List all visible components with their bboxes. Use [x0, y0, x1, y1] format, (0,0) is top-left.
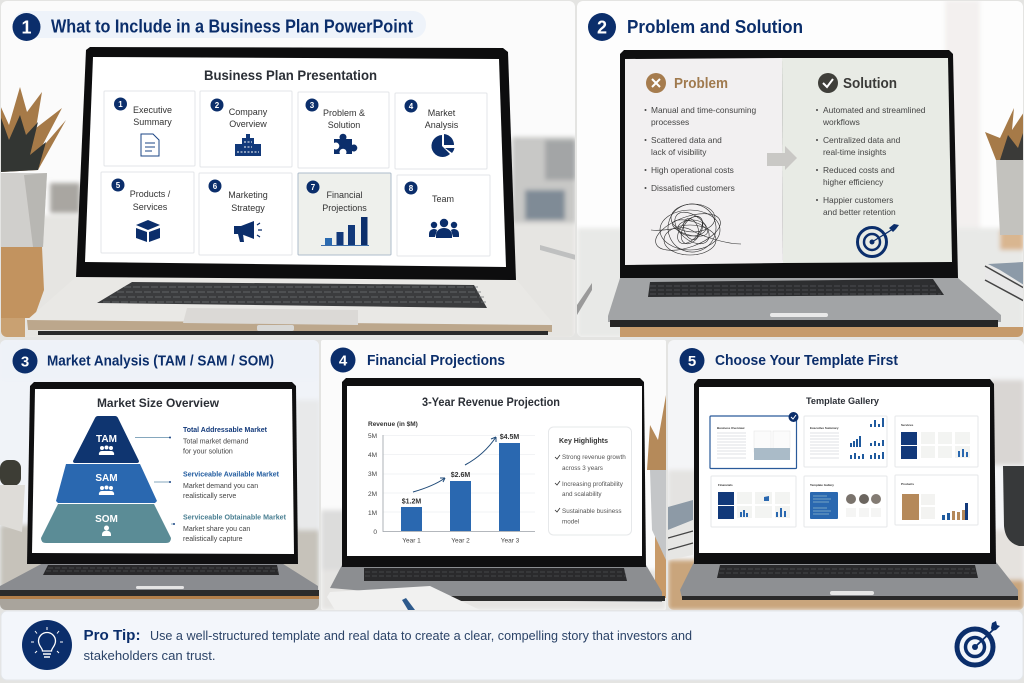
tip text: stakeholders can trust.: [84, 649, 216, 663]
SOM description: Market share you can: [183, 526, 250, 533]
template 2: Executive Summary: [810, 426, 839, 430]
template 5: [804, 476, 887, 527]
TAM tier: TAM: [96, 434, 117, 445]
card: market analysis: 4: [409, 102, 414, 111]
card: problem and solution: 3: [310, 101, 315, 110]
card: financial projections: [298, 173, 391, 255]
card: products and services: Services: [133, 202, 168, 212]
SAM description: Serviceable Available Market: [183, 470, 279, 478]
screen: [625, 58, 952, 265]
bar chart: 5M: [368, 433, 377, 440]
bar chart: Year 1: [402, 538, 421, 544]
panel 1: what to include: [0, 1, 576, 340]
heading 4: Financial Projections: [367, 353, 505, 369]
key highlights box: Sustainable business: [562, 508, 622, 515]
card: market analysis: Market: [428, 108, 456, 118]
screen: [347, 386, 642, 556]
template 6: Products: [901, 482, 914, 486]
icon: target: [957, 621, 1000, 665]
problem column: Problem: [674, 75, 728, 92]
card: products and services: 5: [116, 181, 121, 190]
TAM description: Total Addressable Market: [183, 425, 267, 434]
solution column: workflows: [822, 117, 860, 127]
key highlights box: and scalability: [562, 491, 602, 498]
key highlights box: across 3 years: [562, 465, 603, 472]
template 3: [895, 416, 978, 467]
card: problem and solution: Problem &: [323, 108, 365, 118]
TAM description: Total market demand: [183, 438, 248, 446]
icon: books: [985, 262, 1024, 301]
problem column: High operational costs: [651, 165, 734, 175]
slide title: Market Size Overview: [97, 396, 220, 410]
keyboard: [364, 568, 627, 581]
SOM description: Serviceable Obtainable Market: [183, 512, 286, 522]
card: products and services: Products /: [130, 189, 171, 199]
pyramid: [41, 416, 171, 543]
laptop 2: [608, 50, 1001, 327]
key highlights box: [548, 427, 632, 535]
template 5: Template Gallery: [810, 483, 834, 487]
tip text: Use a well-structured template and real data to create a clear, compelling story that investors and: [150, 629, 692, 643]
bar chart: $4.5M: [500, 434, 519, 441]
bar chart: $1.2M: [402, 498, 421, 506]
pro tip banner: [1, 611, 1023, 680]
card: marketing strategy: [199, 173, 292, 255]
key highlights box: Strong revenue growth: [562, 454, 626, 461]
card: problem and solution: Solution: [328, 120, 360, 130]
SOM description: [183, 512, 286, 543]
icon: mug: [1003, 466, 1024, 546]
heading 3: Market Analysis (TAM / SAM / SOM): [47, 354, 274, 370]
template 4: [711, 476, 796, 527]
laptop 5: [680, 379, 1018, 600]
icon: plant right: [985, 108, 1024, 235]
laptop 3: [0, 382, 319, 599]
slide title: Business Plan Presentation: [204, 67, 377, 83]
solution column: [816, 73, 926, 217]
template 4: Financials: [718, 483, 733, 487]
card: market analysis: [395, 93, 487, 169]
card: executive summary: Summary: [133, 117, 172, 127]
bar chart: Year 3: [501, 538, 520, 544]
solution column: Happier customers: [823, 195, 893, 205]
bar chart: Revenue (in $M): [368, 421, 418, 428]
card: executive summary: 1: [118, 100, 123, 109]
card: executive summary: Executive: [133, 105, 172, 115]
bar chart: [368, 421, 535, 544]
heading 1: 1: [21, 18, 32, 38]
heading 1: [12, 11, 426, 41]
TAM description: for your solution: [183, 448, 233, 456]
icon: pen: [577, 283, 592, 315]
laptop 4: [330, 378, 665, 602]
heading 4: [330, 348, 505, 372]
SAM description: Market demand you can: [183, 483, 258, 490]
heading 5: 5: [688, 353, 696, 370]
icon: books: [668, 500, 693, 560]
card: financial projections: 7: [311, 183, 316, 192]
card: company overview: Overview: [229, 119, 267, 129]
bar chart: 1M: [368, 510, 377, 517]
heading 5: [680, 348, 898, 373]
keyboard: [717, 565, 978, 578]
arrow: [767, 146, 797, 170]
solution column: Reduced costs and: [823, 165, 895, 175]
bar chart: 4M: [368, 452, 377, 459]
card: problem and solution: [298, 92, 389, 168]
icon: plant: [647, 395, 666, 560]
template 6: [895, 475, 978, 525]
icon: cactus pot: [0, 460, 25, 532]
SOM description: realistically capture: [183, 536, 243, 543]
card: team: [397, 175, 490, 256]
card: company overview: 2: [215, 101, 220, 110]
template 3: Services: [901, 423, 914, 427]
heading 2: 2: [597, 18, 607, 38]
icon: pen on desk: [540, 245, 576, 260]
solution column: Automated and streamlined: [823, 105, 926, 115]
card: financial projections: Projections: [322, 203, 367, 213]
problem column: lack of visibility: [651, 147, 707, 157]
key highlights box: model: [562, 518, 579, 526]
screen: [699, 387, 990, 553]
icon: plant: [0, 87, 66, 172]
notebook: [327, 586, 480, 610]
solution column: and better retention: [823, 207, 896, 217]
heading 2: [588, 13, 803, 41]
SAM description: [183, 470, 279, 500]
card: company overview: [200, 91, 292, 167]
panel 3: market analysis: [0, 340, 320, 610]
solution column: Solution: [843, 75, 897, 92]
problem column: [644, 73, 757, 193]
template 1 selected: [710, 412, 798, 468]
heading 1: What to Include in a Business Plan PowerPoint: [51, 16, 413, 36]
keyboard: [648, 279, 944, 297]
growth arrows: [413, 437, 496, 492]
card: products and services: [101, 172, 194, 253]
problem column: processes: [651, 117, 689, 127]
heading 5: Choose Your Template First: [715, 353, 898, 369]
problem column: Scattered data and: [651, 135, 722, 145]
keyboard: [97, 282, 487, 308]
screen: [32, 389, 294, 554]
tip text: [84, 628, 692, 663]
panel 5: choose your template: [668, 340, 1024, 610]
card: team: 8: [409, 184, 414, 193]
SOM tier: SOM: [95, 514, 118, 525]
icon: target: [858, 224, 899, 256]
problem column: Dissatisfied customers: [651, 183, 735, 193]
card: team: Team: [432, 194, 454, 204]
solution column: higher efficiency: [823, 177, 884, 187]
card: executive summary: [104, 91, 195, 166]
key highlights box: Key Highlights: [559, 438, 608, 445]
tip text: Pro Tip:: [84, 628, 140, 644]
problem column: Manual and time-consuming: [651, 105, 757, 115]
icon: lightbulb: [22, 620, 72, 670]
bar chart: Year 2: [451, 538, 470, 544]
card: financial projections: Financial: [326, 190, 363, 200]
heading 3: [12, 348, 274, 374]
laptop 1: [27, 47, 552, 335]
slide title: 3-Year Revenue Projection: [422, 395, 560, 409]
card: company overview: Company: [229, 107, 268, 117]
heading 2: Problem and Solution: [627, 17, 803, 37]
card: marketing strategy: Strategy: [231, 203, 265, 213]
bar chart: $2.6M: [451, 472, 470, 479]
card: marketing strategy: 6: [213, 182, 218, 191]
solution column: Centralized data and: [823, 135, 901, 145]
SAM description: realistically serve: [183, 493, 236, 500]
panel 2: problem and solution: [577, 0, 1024, 338]
icon: tangled scribble: [651, 197, 741, 259]
slide title: Template Gallery: [806, 396, 880, 407]
panel 4: financial projections: [321, 340, 666, 610]
keyboard: [43, 565, 279, 575]
template 1 selected: Business Overview: [717, 426, 745, 430]
bar chart: 2M: [368, 491, 377, 498]
heading 4: 4: [339, 352, 348, 370]
card: market analysis: Analysis: [425, 120, 459, 130]
bar chart: 3M: [368, 471, 377, 478]
TAM description: [183, 425, 267, 456]
key highlights box: Increasing profitability: [562, 481, 624, 488]
screen: [85, 57, 506, 267]
template 2: [804, 416, 887, 467]
SAM tier: SAM: [95, 473, 118, 484]
heading 3: 3: [21, 354, 29, 370]
card: marketing strategy: Marketing: [228, 190, 268, 200]
bar chart: 0: [373, 529, 377, 536]
solution column: real-time insights: [823, 147, 886, 157]
